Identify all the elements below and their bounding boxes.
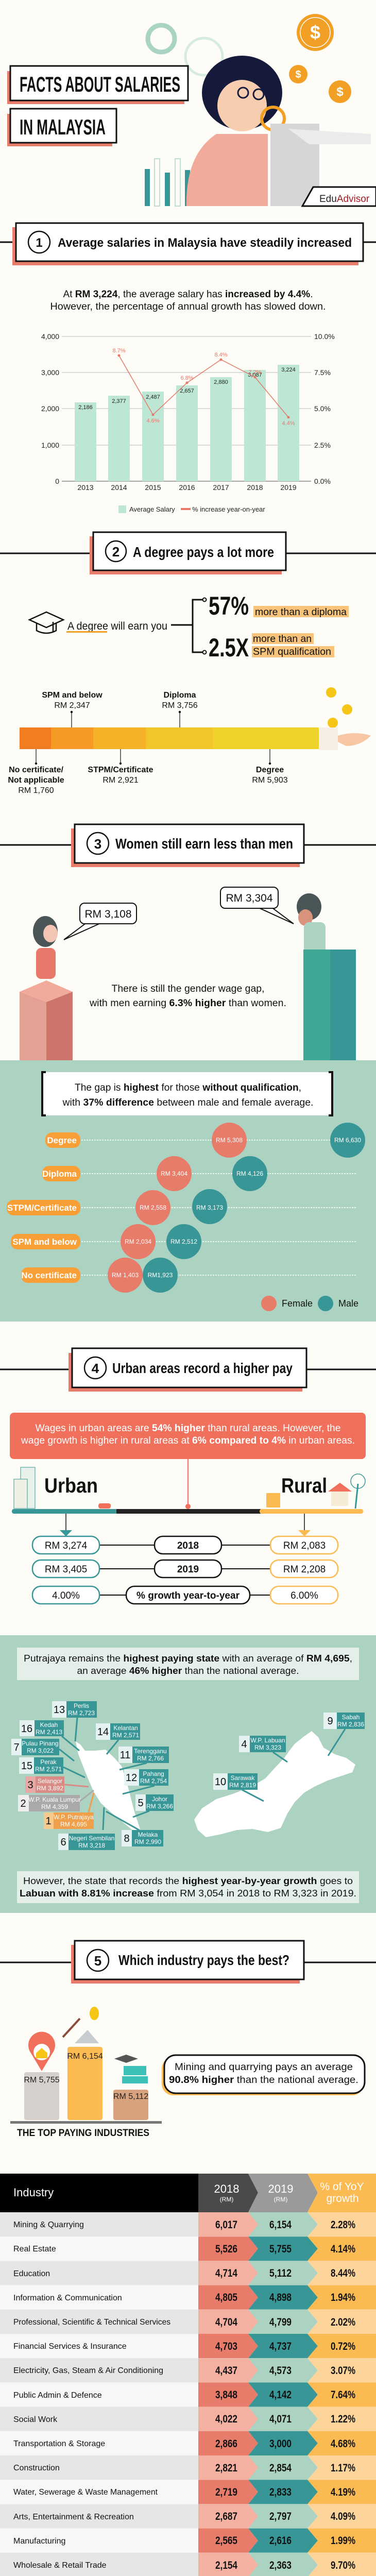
label: Kedah: RM 2,413 <box>36 1728 62 1736</box>
text block: Labuan growth: However, the state that records the highest year-by-year growth goes to <box>23 1876 353 1886</box>
table rows: 6,017 <box>215 2219 237 2231</box>
legend: Male <box>338 1298 358 1309</box>
urban vs rural comparison: 6.00% <box>290 1590 318 1601</box>
label: Perlis: Perlis <box>74 1702 89 1709</box>
education salary bar: RM 3,756 <box>162 701 198 710</box>
chart: average salary bar + growth line: 2,186 <box>78 404 93 411</box>
callout: urban vs rural <box>10 1413 366 1459</box>
chart: average salary bar + growth line: 7.2% <box>248 369 262 376</box>
label: Labuan <box>239 1736 286 1752</box>
degree comparison: 2.5X <box>209 633 249 662</box>
section 3 header: Women still earn less than men <box>115 836 293 852</box>
table rows: 2,363 <box>269 2560 292 2571</box>
speech bubble: female <box>64 903 136 940</box>
table rows: 5,526 <box>215 2243 237 2255</box>
icon: bars <box>145 159 190 206</box>
table rows: 2,854 <box>269 2462 292 2474</box>
label: Sabah: 9 <box>327 1716 333 1727</box>
label: Pahang: 12 <box>126 1772 137 1784</box>
table header: Industry <box>13 2186 54 2199</box>
table rows: 4,704 <box>215 2316 237 2328</box>
label: Perak: Perak <box>40 1758 57 1766</box>
table rows: 2,866 <box>215 2438 237 2450</box>
label: Johor: RM 3,266 <box>146 1803 173 1810</box>
chart: average salary bar + growth line: 2,000 <box>41 404 59 413</box>
label: Sarawak: Sarawak <box>231 1774 255 1782</box>
table rows: 9.70% <box>331 2560 355 2571</box>
label: Pahang: RM 2,754 <box>140 1777 167 1785</box>
chart: average salary bar + growth line: 7.5% <box>314 368 331 377</box>
panel: state map <box>0 1635 376 1913</box>
bubbles: RM 1,403 <box>112 1272 139 1279</box>
table rows: Mining & Quarrying <box>13 2221 84 2229</box>
section 1 header: 1 <box>36 236 43 250</box>
section 3 header: 3 <box>94 836 101 852</box>
education salary bar: No certificate/ <box>9 766 63 774</box>
label: Putrajaya: 1 <box>45 1816 52 1827</box>
icon: city buildings <box>14 1467 111 1509</box>
label: Kuala Lumpur <box>18 1795 81 1811</box>
legend <box>261 1296 358 1311</box>
chart: average salary bar + growth line: 10.0% <box>314 332 335 341</box>
label: Putrajaya <box>44 1812 94 1829</box>
title: FACTS ABOUT SALARIES <box>20 72 180 96</box>
qualification labels: Diploma <box>42 1169 77 1179</box>
label: Kelantan: RM 2,571 <box>112 1732 139 1739</box>
text block: Putrajaya: an average 46% higher than the national average. <box>77 1666 299 1676</box>
table rows: 2.28% <box>331 2219 355 2231</box>
bubbles: RM 5,308 <box>216 1137 243 1144</box>
degree comparison: more than a diploma <box>255 607 347 618</box>
label: Labuan: 4 <box>241 1739 247 1750</box>
section 2 header: 2 <box>112 544 119 560</box>
label: Negeri Sembilan: RM 3,218 <box>78 1842 105 1849</box>
section 2 header <box>0 532 376 574</box>
icon: coins: $ <box>310 22 320 43</box>
label: Kedah <box>20 1720 64 1736</box>
degree comparison: A degree will earn you <box>67 620 167 632</box>
table header: (RM) <box>274 2196 287 2203</box>
table rows: 4,703 <box>215 2341 237 2352</box>
label: Sarawak: 10 <box>215 1776 226 1788</box>
urban vs rural comparison: RM 2,083 <box>283 1540 326 1551</box>
hero illustration <box>145 14 371 206</box>
label: Sabah: Sabah <box>342 1714 360 1721</box>
chart: average salary bar + growth line: 8.7% <box>112 348 126 354</box>
table rows: Arts, Entertainment & Recreation <box>13 2513 134 2521</box>
education salary bar: Diploma <box>163 691 196 700</box>
label: Selangor: RM 3,892 <box>37 1785 63 1792</box>
legend <box>118 505 265 513</box>
urban vs rural comparison: RM 3,405 <box>45 1564 87 1575</box>
table rows: 4,437 <box>215 2365 237 2377</box>
label: Kelantan: 14 <box>97 1726 109 1738</box>
chart: average salary bar + growth line: 5.0% <box>314 404 331 413</box>
bubbles: RM 2,558 <box>140 1204 166 1211</box>
label: Labuan: RM 3,323 <box>254 1744 281 1751</box>
label: Perak: 15 <box>21 1760 32 1772</box>
urban vs rural comparison: RM 2,208 <box>283 1564 326 1575</box>
table rows <box>0 2212 376 2576</box>
table rows: 5,755 <box>269 2243 292 2255</box>
table rows: 1.99% <box>331 2535 355 2547</box>
degree comparison: 57% <box>209 591 249 620</box>
section 1 header: Average salaries in Malaysia have steadily increased <box>58 236 352 250</box>
label: Negeri Sembilan: Negeri Sembilan <box>69 1835 114 1842</box>
label: Selangor: Selangor <box>38 1777 62 1785</box>
table rows: Education <box>13 2269 50 2278</box>
label: Putrajaya: RM 4,695 <box>60 1821 87 1828</box>
logo tag: EduAdvisor: EduAdvisor <box>319 194 370 205</box>
table rows: 4.19% <box>331 2486 355 2498</box>
label: Kelantan <box>96 1723 140 1740</box>
label: Melaka <box>122 1830 163 1846</box>
icon: rural house and palm <box>266 1474 365 1509</box>
section 4 header <box>0 1348 376 1392</box>
table rows: 3,848 <box>215 2389 237 2401</box>
degree comparison <box>29 591 349 662</box>
degree comparison: SPM qualification <box>253 647 331 657</box>
table rows: 2,565 <box>215 2535 237 2547</box>
bubbles: RM 3,404 <box>161 1170 187 1177</box>
chart: average salary bar + growth line: 1,000 <box>41 441 59 449</box>
urban vs rural comparison <box>12 1459 365 1604</box>
table rows: 1.94% <box>331 2292 355 2303</box>
label: Selangor <box>25 1776 64 1793</box>
table rows: 2.02% <box>331 2316 355 2328</box>
label: Perlis: RM 2,723 <box>68 1709 95 1717</box>
label: Melaka: 8 <box>124 1833 130 1844</box>
table rows: 2,821 <box>215 2462 237 2474</box>
chart: average salary bar + growth line: 3,224 <box>281 367 296 373</box>
label: Kuala Lumpur: RM 4,359 <box>41 1803 68 1810</box>
table header: 2018 <box>214 2182 239 2195</box>
table rows: 6,154 <box>269 2219 292 2231</box>
table rows: 2,154 <box>215 2560 237 2571</box>
table rows: 4,799 <box>269 2316 292 2328</box>
table rows: 2,797 <box>269 2511 292 2522</box>
chart: average salary bar + growth line: 3,000 <box>41 368 59 377</box>
chart: average salary bar + growth line: 3,087 <box>248 372 262 378</box>
label: Johor: Johor <box>152 1795 167 1803</box>
urban vs rural comparison: 2019 <box>177 1564 199 1575</box>
intro text section 1 <box>50 289 326 312</box>
speech bubble: female: RM 3,108 <box>84 908 132 920</box>
icon: graduation cap <box>29 612 63 633</box>
label: Pulau Pinang: Pulau Pinang <box>22 1740 59 1747</box>
table rows: 8.44% <box>331 2267 355 2279</box>
urban vs rural comparison: Urban <box>44 1475 98 1497</box>
chart: average salary bar + growth line: 2,487 <box>146 394 160 400</box>
figure: woman on pedestal <box>20 916 73 1060</box>
label: Labuan: W.P. Labuan <box>250 1737 285 1744</box>
chart: average salary bar + growth line: 2016 <box>179 483 195 492</box>
table rows: Construction <box>13 2464 60 2472</box>
education salary bar: RM 2,921 <box>102 776 139 785</box>
label: Sabah: RM 2,836 <box>337 1721 364 1728</box>
map: Borneo <box>194 1731 355 1837</box>
table rows: Electricity, Gas, Steam & Air Conditioning <box>13 2366 163 2375</box>
degree comparison: more than an <box>253 634 312 645</box>
urban vs rural comparison: Rural <box>281 1475 327 1497</box>
map: peninsular Malaysia <box>76 1741 140 1831</box>
chart: average salary bar + growth line: 2014 <box>111 483 127 492</box>
table rows: 4,022 <box>215 2413 237 2425</box>
panel: gender gap by qualification <box>0 1060 376 1321</box>
title: IN MALAYSIA <box>20 115 106 139</box>
woman figure <box>186 56 371 206</box>
intro text section 1: However, the percentage of annual growth has slowed down. <box>50 301 326 312</box>
table rows: 4.68% <box>331 2438 355 2450</box>
callout: mining: Mining and quarrying pays an average <box>175 2062 353 2073</box>
legend: % increase year-on-year <box>192 505 265 513</box>
label: Pahang: Pahang <box>143 1770 164 1777</box>
speech bubble: male: RM 3,304 <box>226 892 273 904</box>
education salary bar: Degree <box>256 766 284 774</box>
callout: urban vs rural: Wages in urban areas are 54% higher than rural areas. However, the <box>35 1423 341 1434</box>
chart: top paying industries: RM 6,154 <box>67 2052 103 2061</box>
education salary bar: STPM/Certificate <box>88 766 153 774</box>
urban vs rural comparison: % growth year-to-year <box>136 1590 240 1601</box>
table rows: Wholesale & Retail Trade <box>13 2561 107 2570</box>
table rows: 2,687 <box>215 2511 237 2522</box>
education salary bar: RM 5,903 <box>252 776 288 785</box>
label: Perlis <box>52 1701 97 1718</box>
callout: gap highest <box>42 1072 332 1115</box>
education salary bar: RM 1,760 <box>18 786 54 795</box>
label: Pulau Pinang: 7 <box>13 1742 20 1753</box>
label: Putrajaya: W.P. Putrajaya <box>54 1814 94 1821</box>
table header: growth <box>326 2193 359 2205</box>
section 5 header: Which industry pays the best? <box>118 1952 289 1968</box>
bubbles: RM 2,034 <box>125 1238 151 1245</box>
label: Johor <box>135 1794 174 1811</box>
speech bubble: male <box>220 887 294 924</box>
chart: average salary bar + growth line: 4.4% <box>282 420 295 427</box>
section 4 header: 4 <box>92 1361 99 1376</box>
table rows: 4,898 <box>269 2292 292 2303</box>
table rows: Social Work <box>13 2415 58 2424</box>
label: Perlis: 13 <box>54 1704 65 1716</box>
bubbles <box>108 1123 365 1293</box>
gender figures: with men earning 6.3% higher than women. <box>89 998 286 1009</box>
chart: average salary bar + growth line <box>41 332 335 513</box>
table rows: 3,000 <box>269 2438 292 2450</box>
table rows: Professional, Scientific & Technical Services <box>13 2318 170 2327</box>
urban vs rural comparison: 4.00% <box>52 1590 80 1601</box>
chart: average salary bar + growth line: 6.8% <box>180 375 194 381</box>
label: Negeri Sembilan <box>58 1834 115 1850</box>
table rows: 0.72% <box>331 2341 355 2352</box>
table rows: 2,833 <box>269 2486 292 2498</box>
table rows: Manufacturing <box>13 2537 65 2546</box>
text block: Labuan growth <box>17 1871 359 1903</box>
education salary bar: Not applicable <box>8 776 64 785</box>
pointer lines <box>59 1718 345 1830</box>
text block: Putrajaya: Putrajaya remains the highest paying state with an average of RM 4,695 , <box>24 1653 352 1664</box>
label: Selangor: 3 <box>27 1780 33 1791</box>
chart: average salary bar + growth line: 2013 <box>77 483 94 492</box>
table rows: Real Estate <box>13 2245 56 2253</box>
label: Negeri Sembilan: 6 <box>60 1837 66 1848</box>
table rows: Information & Communication <box>13 2294 122 2302</box>
label: Melaka: RM 2,990 <box>134 1838 161 1845</box>
chart: average salary bar + growth line: 0.0% <box>314 477 331 485</box>
chart: top paying industries: THE TOP PAYING INDUSTRIES <box>17 2128 149 2139</box>
chart: average salary bar + growth line: 2019 <box>280 483 297 492</box>
label: Terengganu: 11 <box>120 1750 130 1761</box>
bubbles: RM 4,126 <box>236 1170 263 1177</box>
table rows: 4,573 <box>269 2365 292 2377</box>
table rows: 4,714 <box>215 2267 237 2279</box>
table rows: 4,071 <box>269 2413 292 2425</box>
qualification labels: No certificate <box>21 1270 77 1280</box>
label: Kuala Lumpur: 2 <box>20 1798 26 1809</box>
table rows: 4,737 <box>269 2341 292 2352</box>
label: Kelantan: Kelantan <box>113 1724 138 1732</box>
callout: gap highest: with 37% difference between male and female average. <box>62 1097 314 1108</box>
chart: average salary bar + growth line: 2.5% <box>314 441 331 449</box>
icon: books and cap <box>114 2055 148 2083</box>
qualification labels: SPM and below <box>12 1237 77 1247</box>
qualification labels: STPM/Certificate <box>7 1203 77 1213</box>
table: industry salaries <box>0 2174 376 2576</box>
callout: urban vs rural: wage growth is higher in rural areas at 6% compared to 4% in urban areas. <box>21 1435 355 1446</box>
label: Johor: 5 <box>138 1798 144 1809</box>
chart: average salary bar + growth line: 4.6% <box>146 418 160 424</box>
bubbles: RM 6,630 <box>334 1137 361 1144</box>
intro text section 1: At RM 3,224, the average salary has increased by 4.4%. <box>63 289 313 300</box>
label: Terengganu: RM 2,766 <box>137 1755 164 1762</box>
label: Pulau Pinang: RM 3,022 <box>27 1747 54 1754</box>
section 5 header: 5 <box>94 1953 101 1969</box>
icon: pickaxe and mountain <box>63 2007 99 2043</box>
state labels <box>11 1701 365 1850</box>
education salary bar <box>8 687 371 795</box>
chart: average salary bar + growth line: 2017 <box>213 483 229 492</box>
qualification labels <box>7 1132 80 1283</box>
table rows: 7.64% <box>331 2389 355 2401</box>
label: Kuala Lumpur: W.P. Kuala Lumpur <box>28 1796 81 1803</box>
label: Sabah <box>323 1713 365 1729</box>
table rows: 3.07% <box>331 2365 355 2377</box>
education salary bar: RM 2,347 <box>54 701 90 710</box>
icon: location pin <box>28 2032 55 2071</box>
label: Melaka: Melaka <box>138 1831 158 1838</box>
chart: average salary bar + growth line: 2,657 <box>180 388 194 394</box>
icon: coins: $ <box>295 69 301 80</box>
chart: average salary bar + growth line: 2,377 <box>112 398 126 404</box>
text block: Labuan growth: Labuan with 8.81% increase from RM 3,054 in 2018 to RM 3,323 in 2019. <box>20 1888 356 1899</box>
callout: mining <box>162 2055 365 2095</box>
chart: top paying industries: RM 5,755 <box>24 2076 60 2084</box>
qualification labels: Degree <box>47 1136 77 1145</box>
section 5 header <box>0 1941 376 1984</box>
table rows: 4.09% <box>331 2511 355 2522</box>
label: Kedah: Kedah <box>40 1721 58 1728</box>
section 2 header: A degree pays a lot more <box>133 544 274 560</box>
label: Perak: RM 2,571 <box>35 1766 62 1773</box>
table header: (RM) <box>220 2196 233 2203</box>
label: Sarawak: RM 2,819 <box>229 1782 256 1789</box>
table rows: 4.14% <box>331 2243 355 2255</box>
label: Terengganu <box>118 1747 169 1763</box>
table header: % of YoY <box>320 2181 364 2193</box>
education salary bar: SPM and below <box>42 691 102 700</box>
bubbles: RM 3,173 <box>196 1204 223 1211</box>
label: Kedah: 16 <box>21 1723 32 1735</box>
gender figures <box>20 887 356 1060</box>
legend: Female <box>282 1298 313 1309</box>
label: Perak <box>19 1757 63 1774</box>
table rows: 4,805 <box>215 2292 237 2303</box>
section 1 header <box>0 223 376 265</box>
urban vs rural comparison: RM 3,274 <box>45 1540 88 1551</box>
table rows: Financial Services & Insurance <box>13 2342 127 2351</box>
icon: coins <box>289 14 351 103</box>
table rows: 1.17% <box>331 2462 355 2474</box>
label: Pahang <box>124 1769 168 1786</box>
bubbles: RM 2,512 <box>170 1238 197 1245</box>
chart: average salary bar + growth line: 2,880 <box>214 379 228 385</box>
table rows: 2,616 <box>269 2535 292 2547</box>
icon: hand with coins <box>319 687 371 750</box>
bubbles: RM1,923 <box>148 1272 173 1279</box>
section 4 header: Urban areas record a higher pay <box>112 1360 293 1376</box>
label: Sarawak <box>213 1773 258 1790</box>
chart: average salary bar + growth line: 8.4% <box>214 352 228 358</box>
label: Pulau Pinang <box>11 1739 59 1755</box>
label: Terengganu: Terengganu <box>134 1748 167 1755</box>
title <box>7 66 188 146</box>
table rows: Transportation & Storage <box>13 2439 105 2448</box>
chart: average salary bar + growth line: 2018 <box>247 483 263 492</box>
table header: 2019 <box>268 2182 293 2195</box>
chart: top paying industries: RM 5,112 <box>113 2092 148 2101</box>
chart: top paying industries <box>10 2007 162 2139</box>
chart: average salary bar + growth line: 0 <box>55 477 59 485</box>
callout: gap highest: The gap is highest for those without qualification, <box>75 1082 301 1093</box>
figure: man on block <box>297 893 356 1060</box>
gender figures: There is still the gender wage gap, <box>111 984 265 994</box>
icon: coins: $ <box>336 85 344 99</box>
logo tag: EduAdvisor <box>302 187 376 206</box>
table header <box>0 2174 376 2212</box>
urban vs rural comparison: 2018 <box>177 1540 199 1551</box>
chart: average salary bar + growth line: 4,000 <box>41 332 59 341</box>
table rows: Public Admin & Defence <box>13 2391 102 2400</box>
table rows: 1.22% <box>331 2413 355 2425</box>
chart: average salary bar + growth line: 2015 <box>145 483 161 492</box>
callout: mining: 90.8% higher than the national average. <box>169 2075 358 2086</box>
section 3 header <box>0 824 376 867</box>
table rows: Water, Sewerage & Waste Management <box>13 2488 158 2497</box>
legend: Average Salary <box>129 505 175 513</box>
table rows: 4,142 <box>269 2389 292 2401</box>
table rows: 5,112 <box>269 2267 292 2279</box>
table rows: 2,719 <box>215 2486 237 2498</box>
icon: gears <box>148 25 223 75</box>
text block: Putrajaya <box>17 1648 359 1680</box>
